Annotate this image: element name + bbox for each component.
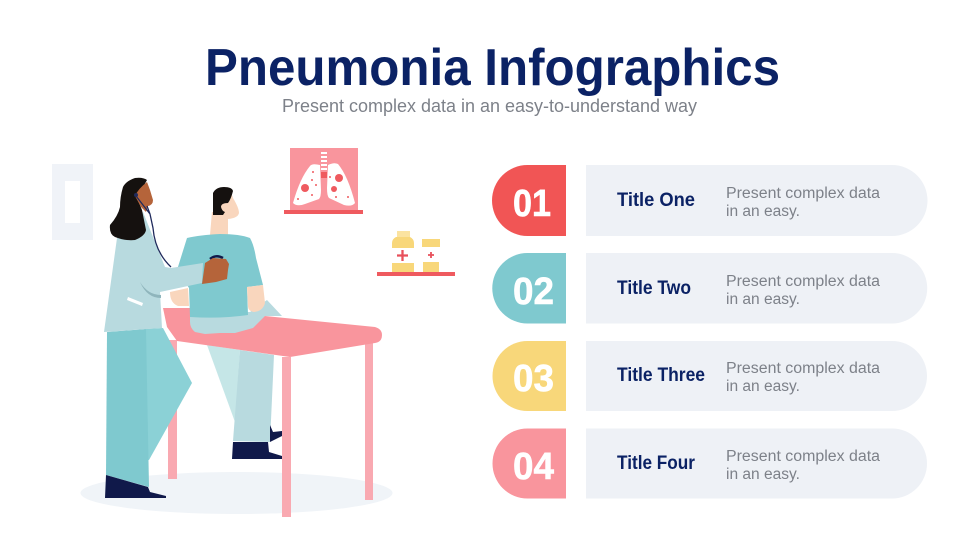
wall light switch: [52, 164, 93, 240]
head: [215, 190, 239, 219]
sleeve fold: [140, 282, 161, 298]
content pill: [586, 165, 928, 236]
shelf: [377, 272, 455, 276]
coat: [104, 212, 203, 332]
row 02: Title Two: [617, 278, 691, 299]
hair: [213, 187, 233, 215]
table right leg: [365, 340, 373, 500]
title: Pneumonia Infographics: [205, 39, 780, 97]
description: in an easy.: [726, 291, 800, 308]
patient: [170, 187, 282, 334]
shoe: [105, 475, 166, 498]
shirt: [177, 234, 263, 318]
row 03: Title Three: [617, 365, 705, 386]
face: [135, 182, 153, 212]
hair: [110, 178, 147, 240]
number tab: [492, 253, 566, 324]
content pill: [586, 253, 927, 324]
trousers back leg: [144, 328, 192, 460]
row 04: [492, 428, 927, 498]
medicine shelf: [377, 231, 455, 276]
trachea: [321, 153, 327, 169]
illustration: doctor examining patient: [52, 164, 392, 517]
row 03: 03: [513, 358, 554, 400]
number tab: [492, 341, 566, 411]
lung x-ray poster: [284, 148, 363, 214]
stethoscope: [136, 196, 171, 267]
description: Present complex data: [726, 448, 880, 465]
hand: [202, 258, 229, 284]
row 01: Title One: [617, 190, 695, 211]
description: Present complex data: [726, 185, 880, 202]
trousers front leg: [106, 329, 149, 487]
row 01: [492, 165, 928, 236]
patient legs: [207, 345, 282, 459]
coat pocket: [127, 297, 143, 306]
content pill: [586, 428, 927, 498]
row 04: 04: [513, 446, 554, 488]
virus marks: [297, 171, 349, 200]
lap: [190, 300, 282, 334]
number tab: [492, 428, 566, 498]
row 01: 01: [513, 183, 551, 225]
subtitle: Present complex data in an easy-to-understand way: [282, 96, 697, 116]
number tab: [492, 165, 566, 236]
row 02: 02: [513, 271, 554, 313]
lungs: [293, 163, 355, 206]
row 04: Title Four: [617, 453, 696, 474]
table back leg: [168, 340, 177, 479]
stethoscope chest piece: [210, 256, 223, 259]
row 03: [492, 341, 927, 411]
content pill: [586, 341, 927, 411]
poster shelf: [284, 210, 363, 214]
arms: [170, 285, 265, 312]
small jar: [422, 239, 440, 272]
row 02: [492, 253, 927, 324]
table front leg: [282, 357, 291, 517]
neck: [210, 212, 228, 235]
description: Present complex data: [726, 273, 880, 290]
description: in an easy.: [726, 203, 800, 220]
description: in an easy.: [726, 378, 800, 395]
big bottle: [392, 231, 414, 272]
floor shadow: [80, 472, 392, 514]
description: in an easy.: [726, 466, 800, 483]
table top: [163, 308, 382, 357]
description: Present complex data: [726, 360, 880, 377]
doctor: [104, 178, 229, 498]
